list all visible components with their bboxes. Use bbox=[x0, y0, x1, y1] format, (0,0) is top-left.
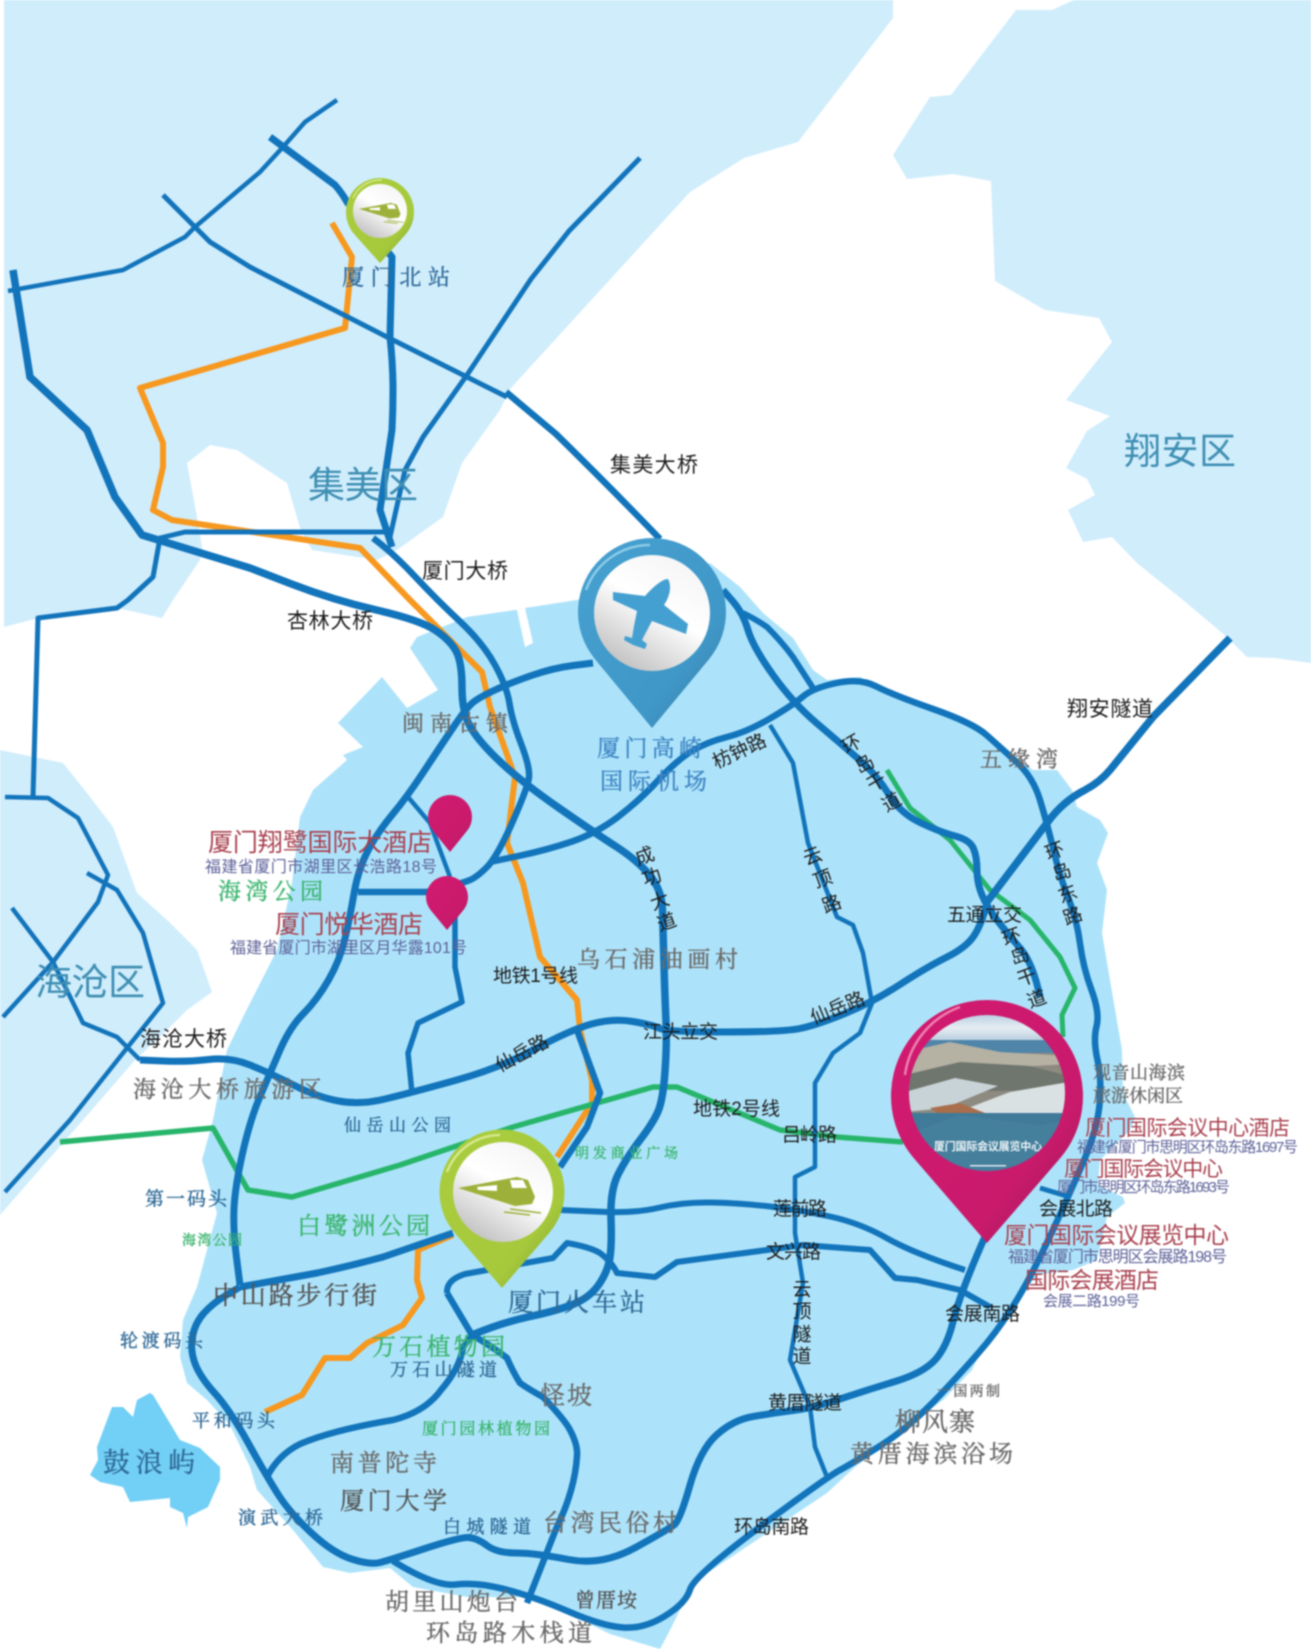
south branch bbox=[267, 1333, 473, 1477]
place labels: 中山路步行街 bbox=[213, 1282, 377, 1310]
label: Yunding road: 顶 bbox=[810, 867, 836, 893]
place labels: 厦门北站 bbox=[342, 265, 450, 290]
place labels: 轮渡码头 bbox=[120, 1331, 204, 1351]
road labels: 黄厝隧道 bbox=[768, 1392, 842, 1414]
label: ring trunk road south: 干 bbox=[1014, 965, 1040, 991]
place labels: 鼓浪屿 bbox=[103, 1448, 195, 1478]
hotel labels bbox=[205, 829, 1298, 1310]
place labels: 国际机场 bbox=[600, 769, 707, 794]
metro line north-east bbox=[887, 770, 1075, 1037]
metro line 1 north bbox=[140, 223, 592, 1157]
road labels: 仙岳路 bbox=[807, 988, 868, 1029]
place labels: 第一码头 bbox=[145, 1188, 228, 1210]
road labels: 集美大桥 bbox=[610, 454, 698, 477]
district labels: 集美区 bbox=[308, 465, 418, 506]
Hubin connectors bbox=[358, 538, 600, 1167]
place labels: 平和码头 bbox=[192, 1411, 276, 1431]
place labels: 万石植物园 bbox=[372, 1334, 505, 1361]
place labels: 厦门大学 bbox=[340, 1488, 447, 1515]
Lianqian road bbox=[560, 1202, 965, 1270]
road labels bbox=[140, 454, 1153, 1538]
place labels: 海湾公园 bbox=[182, 1232, 242, 1249]
hotel labels: 厦门国际会议中心 bbox=[1064, 1158, 1223, 1181]
Haicang roads bbox=[3, 797, 163, 1192]
place labels: 明发商业广场 bbox=[575, 1145, 678, 1162]
label: Chenggong avenue: 大 bbox=[647, 888, 673, 915]
place labels: 观音山海滨 bbox=[1093, 1063, 1185, 1083]
hotel labels: 厦门翔鹭国际大酒店 bbox=[208, 829, 432, 857]
label: ring trunk road south bbox=[999, 925, 1050, 1013]
label: ring east road: 岛 bbox=[1049, 859, 1075, 886]
road labels: 江头立交 bbox=[643, 1021, 718, 1043]
label: ring trunk road north: 岛 bbox=[851, 750, 878, 779]
district labels: 海沧区 bbox=[35, 962, 145, 1003]
place labels: 厦门火车站 bbox=[508, 1289, 645, 1317]
place labels: 怪坡 bbox=[540, 1382, 592, 1410]
label: ring east road: 东 bbox=[1055, 881, 1081, 908]
region: Xiamen island bbox=[180, 563, 1135, 1649]
vertical label: Yunding tunnel bbox=[792, 1280, 812, 1368]
south ring road bbox=[192, 1232, 987, 1563]
road labels: 文兴路 bbox=[766, 1241, 821, 1263]
place labels: 胡里山炮台 bbox=[385, 1589, 518, 1616]
place labels: 白鹭洲公园 bbox=[297, 1213, 430, 1240]
place labels: 旅游休闲区 bbox=[1093, 1086, 1183, 1106]
place labels: 黄厝海滨浴场 bbox=[850, 1441, 1013, 1468]
place labels: 台湾民俗村 bbox=[543, 1510, 677, 1537]
Xinglin bridge road bbox=[13, 270, 666, 1335]
vertical label: Yunding tunnel: 顶 bbox=[792, 1302, 812, 1322]
road labels: 会展南路 bbox=[945, 1303, 1020, 1325]
road labels: 环岛南路 bbox=[734, 1516, 809, 1538]
place labels: 仙岳山公园 bbox=[344, 1116, 451, 1135]
district labels bbox=[35, 431, 1236, 1003]
pin: Xiamen International Conference and Exhibition Center bbox=[891, 1000, 1083, 1243]
pin: Xiamen North Station bbox=[346, 178, 414, 263]
label: Chenggong avenue bbox=[632, 843, 680, 936]
Fangzhong and east coast ring road bbox=[393, 681, 1100, 1628]
label: ring trunk road north: 干 bbox=[864, 769, 890, 797]
hotel labels: 厦门国际会议展览中心 bbox=[1004, 1222, 1229, 1248]
label: ring east road: 环 bbox=[1042, 839, 1068, 865]
place labels: 曾厝垵 bbox=[575, 1589, 638, 1612]
hotel labels: 福建省厦门市湖里区月华露101号 bbox=[230, 939, 467, 957]
road labels: 地铁1号线 bbox=[493, 965, 578, 987]
place labels: 海湾公园 bbox=[218, 879, 323, 904]
west main road bbox=[234, 663, 593, 1285]
road labels: 莲前路 bbox=[773, 1198, 827, 1220]
vertical label: Yunding tunnel: 道 bbox=[792, 1346, 812, 1368]
icon: train small bbox=[359, 203, 404, 223]
Yunding road bbox=[770, 725, 872, 1477]
Wenxing road bbox=[447, 1243, 990, 1307]
label: ring trunk road north: 道 bbox=[878, 788, 905, 817]
island: Gulangyu bbox=[90, 1393, 220, 1528]
hotel labels: 会展二路199号 bbox=[1043, 1293, 1140, 1310]
Zhongshan road bbox=[240, 1233, 453, 1287]
label: Yunding road: 云 bbox=[800, 844, 826, 870]
Xiang'an tunnel bbox=[987, 638, 1230, 902]
place labels: 乌石浦油画村 bbox=[577, 947, 738, 972]
hotel labels: 福建省厦门市思明区会展路198号 bbox=[1008, 1248, 1227, 1266]
metro line 2 bbox=[60, 1087, 903, 1197]
place labels bbox=[103, 265, 1185, 1647]
vertical label: Yunding tunnel: 隧 bbox=[792, 1324, 812, 1346]
island ring main road bbox=[723, 590, 1040, 997]
label: ring trunk road south: 环 bbox=[999, 925, 1025, 951]
place labels: 厦门高崎 bbox=[597, 736, 702, 761]
label: ring trunk road south: 道 bbox=[1024, 986, 1050, 1013]
label: Yunding road bbox=[800, 844, 845, 918]
region: Haicang bbox=[0, 750, 212, 1215]
hotel labels: 福建省厦门市思明区环岛东路1697号 bbox=[1077, 1139, 1298, 1156]
place labels: 五缘湾 bbox=[980, 747, 1058, 772]
road labels: 杏林大桥 bbox=[287, 610, 373, 633]
rim highlight bbox=[905, 1007, 960, 1075]
photo: exhibition center bbox=[905, 1010, 1069, 1175]
airport branch bbox=[743, 613, 813, 688]
place labels: 白城隧道 bbox=[443, 1517, 531, 1537]
road labels: 仙岳路 bbox=[492, 1031, 553, 1077]
district labels: 翔安区 bbox=[1124, 431, 1236, 472]
label: ring east road: 路 bbox=[1060, 903, 1086, 930]
road labels: 枋钟路 bbox=[709, 730, 770, 774]
label: Chenggong avenue: 成 bbox=[632, 843, 658, 870]
place labels: 万石山隧道 bbox=[390, 1360, 497, 1380]
label: Chenggong avenue: 道 bbox=[654, 909, 680, 936]
road labels: 会展北路 bbox=[1039, 1198, 1113, 1220]
place labels: 海沧大桥旅游区 bbox=[133, 1077, 322, 1102]
place labels: 厦门园林植物园 bbox=[422, 1420, 550, 1438]
label: Chenggong avenue: 功 bbox=[639, 864, 665, 891]
road labels: 厦门大桥 bbox=[422, 560, 508, 583]
pin: Xiamen Railway Station bbox=[440, 1129, 564, 1288]
road labels: 地铁2号线 bbox=[693, 1098, 780, 1120]
icon: train bbox=[458, 1177, 541, 1215]
vertical label: Yunding tunnel: 云 bbox=[792, 1280, 812, 1300]
hotel labels: 厦门悦华酒店 bbox=[275, 911, 423, 939]
photo caption: 厦门国际会议展览中心 bbox=[934, 1139, 1042, 1153]
metro lines bbox=[60, 223, 1075, 1412]
hotel labels: 福建省厦门市湖里区长浩路18号 bbox=[205, 858, 437, 876]
pin: hotel Yuehua bbox=[426, 876, 468, 930]
hotel labels: 厦门国际会议中心酒店 bbox=[1085, 1117, 1290, 1140]
place labels: 闽南古镇 bbox=[402, 711, 510, 736]
road labels: 海沧大桥 bbox=[140, 1028, 227, 1051]
region: Jimei bbox=[4, 0, 893, 627]
label: ring trunk road north: 环 bbox=[839, 731, 865, 759]
hotel labels: 厦门市思明区环岛东路1693号 bbox=[1057, 1179, 1230, 1196]
place labels: 南普陀寺 bbox=[330, 1450, 437, 1477]
place labels: 环岛路木栈道 bbox=[426, 1620, 592, 1647]
hotel labels: 国际会展酒店 bbox=[1025, 1267, 1159, 1293]
pin: airport bbox=[578, 538, 726, 728]
Huizhan north road bbox=[1040, 1188, 1070, 1197]
Wanshi road bbox=[447, 1293, 577, 1603]
Xianyue road bbox=[140, 903, 987, 1103]
place labels: 演武大桥 bbox=[238, 1508, 323, 1528]
place labels: 一国两制 bbox=[937, 1384, 1000, 1400]
label: ring trunk road south: 岛 bbox=[1007, 943, 1033, 970]
pin: hotel Xianglu bbox=[428, 795, 472, 852]
label: ring trunk road north bbox=[839, 731, 905, 817]
Jimei roads bbox=[8, 100, 660, 797]
road labels: 吕岭路 bbox=[782, 1124, 837, 1146]
region: Xiang'an bbox=[893, 0, 1311, 663]
place labels: 柳风寨 bbox=[895, 1408, 975, 1437]
label: ring east road bbox=[1042, 839, 1086, 930]
road labels: 五通立交 bbox=[947, 904, 1022, 926]
metro line 1 south bbox=[265, 1235, 453, 1412]
road labels: 翔安隧道 bbox=[1067, 698, 1153, 721]
label: Yunding road: 路 bbox=[819, 891, 845, 918]
icon: plane bbox=[613, 579, 688, 649]
